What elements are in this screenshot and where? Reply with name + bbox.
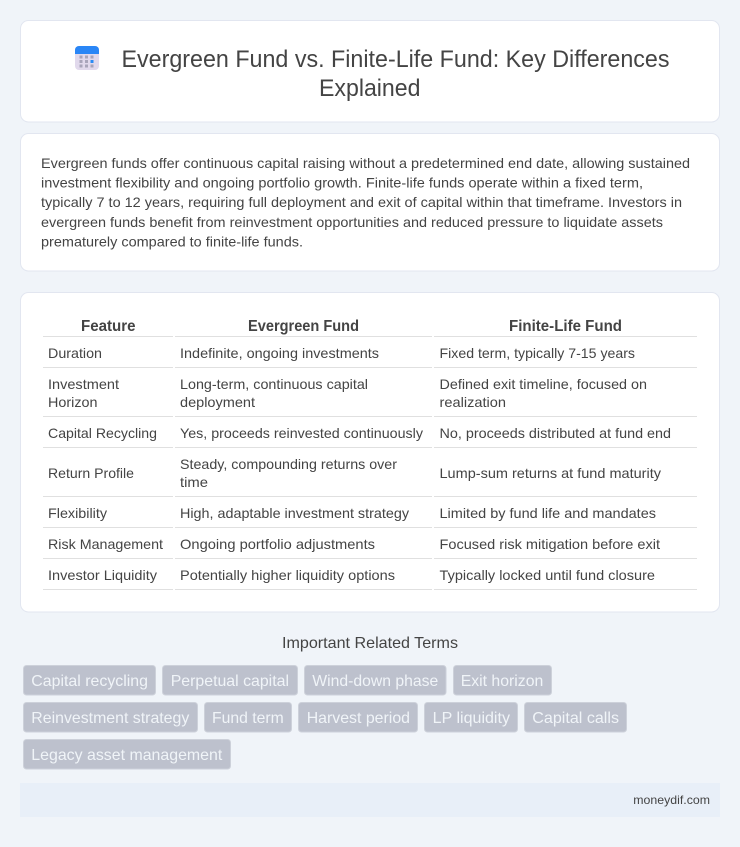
table header: Feature — [81, 318, 136, 335]
tag: perpetual capital: Perpetual capital — [171, 673, 289, 690]
text block: introduction: typically 7 to 12 years, requiring full deployment and exit of capital within that timeframe. Investors in — [41, 194, 682, 210]
text block: introduction: prematurely compared to finite-life funds. — [41, 233, 303, 249]
tag: wind-down phase: Wind-down phase — [312, 673, 438, 690]
row: capital recycling — [43, 425, 697, 448]
row: investor liquidity — [43, 567, 697, 590]
row: return profile — [43, 456, 697, 497]
row: duration: Duration — [48, 345, 102, 361]
tag: fund term — [204, 702, 292, 732]
row: return profile: Return Profile — [48, 465, 134, 481]
row: risk management — [43, 536, 697, 559]
row: return profile: Lump-sum returns at fund maturity — [440, 465, 661, 481]
row: investment horizon — [43, 376, 697, 417]
title: Evergreen Fund vs. Finite-Life Fund: Key Differences — [122, 46, 670, 73]
row: investment horizon: deployment — [180, 394, 255, 410]
tag: capital calls — [524, 702, 626, 732]
tag: exit horizon — [454, 666, 552, 695]
tag: reinvestment strategy — [24, 702, 198, 732]
row: investment horizon: Horizon — [48, 394, 98, 410]
title — [122, 46, 670, 102]
row: investor liquidity: Typically locked until fund closure — [440, 567, 655, 583]
text block: introduction: Evergreen funds offer continuous capital raising without a predetermined end date, allowing sustained — [41, 155, 690, 171]
row: flexibility — [43, 505, 697, 528]
text block: introduction — [41, 155, 690, 249]
row: capital recycling: Capital Recycling — [48, 425, 157, 441]
tag: LP liquidity: LP liquidity — [433, 710, 510, 727]
heading: related terms: Important Related Terms — [282, 635, 458, 652]
tag: perpetual capital — [162, 666, 298, 695]
row: capital recycling: No, proceeds distributed at fund end — [440, 425, 671, 441]
row: duration: Indefinite, ongoing investments — [180, 345, 379, 361]
table header — [43, 318, 697, 337]
row: risk management: Ongoing portfolio adjustments — [180, 536, 375, 552]
tag: LP liquidity — [424, 702, 518, 732]
row: flexibility: Flexibility — [48, 505, 107, 521]
row: investor liquidity: Investor Liquidity — [48, 567, 157, 583]
row: flexibility: High, adaptable investment strategy — [180, 505, 409, 521]
tag: fund term: Fund term — [212, 710, 284, 727]
row: risk management: Focused risk mitigation before exit — [440, 536, 660, 552]
row: capital recycling: Yes, proceeds reinvested continuously — [180, 425, 423, 441]
text block: introduction: investment flexibility and ongoing portfolio growth. Finite-life funds operate within a fixed term, — [41, 175, 643, 191]
tag: exit horizon: Exit horizon — [461, 673, 543, 690]
tag: wind-down phase — [304, 666, 446, 695]
tag: capital calls: Capital calls — [532, 710, 619, 727]
tag: reinvestment strategy: Reinvestment strategy — [31, 710, 189, 727]
panel: introduction — [20, 134, 720, 271]
tag: capital recycling — [24, 666, 156, 695]
title: Explained — [319, 75, 420, 102]
row: investment horizon: Long-term, continuous capital — [180, 376, 368, 392]
table header: Evergreen Fund — [248, 318, 359, 335]
row: flexibility: Limited by fund life and mandates — [440, 505, 656, 521]
tag: harvest period — [298, 702, 418, 732]
tag: capital recycling: Capital recycling — [31, 673, 148, 690]
tag: legacy asset management — [24, 740, 230, 769]
panel: related term tags — [24, 666, 626, 769]
icon: calendar — [75, 46, 99, 70]
row: investor liquidity: Potentially higher liquidity options — [180, 567, 395, 583]
row: investment horizon: realization — [440, 394, 506, 410]
row: investment horizon: Defined exit timeline, focused on — [440, 376, 647, 392]
footer: moneydif.com — [633, 793, 710, 807]
panel: header — [20, 20, 720, 122]
row: investment horizon: Investment — [48, 376, 119, 392]
table header: Finite-Life Fund — [509, 318, 622, 335]
row: duration: Fixed term, typically 7-15 years — [440, 345, 635, 361]
row: return profile: time — [180, 474, 208, 490]
tag: harvest period: Harvest period — [307, 710, 410, 727]
row: risk management: Risk Management — [48, 536, 163, 552]
tag: legacy asset management: Legacy asset management — [31, 747, 223, 764]
footer — [20, 783, 720, 817]
row: return profile: Steady, compounding returns over — [180, 456, 397, 472]
panel: comparison table — [20, 292, 720, 612]
text block: introduction: evergreen funds benefit from reinvestment opportunities and reduced pressure to liquidate assets — [41, 214, 663, 230]
row: duration — [43, 345, 697, 368]
